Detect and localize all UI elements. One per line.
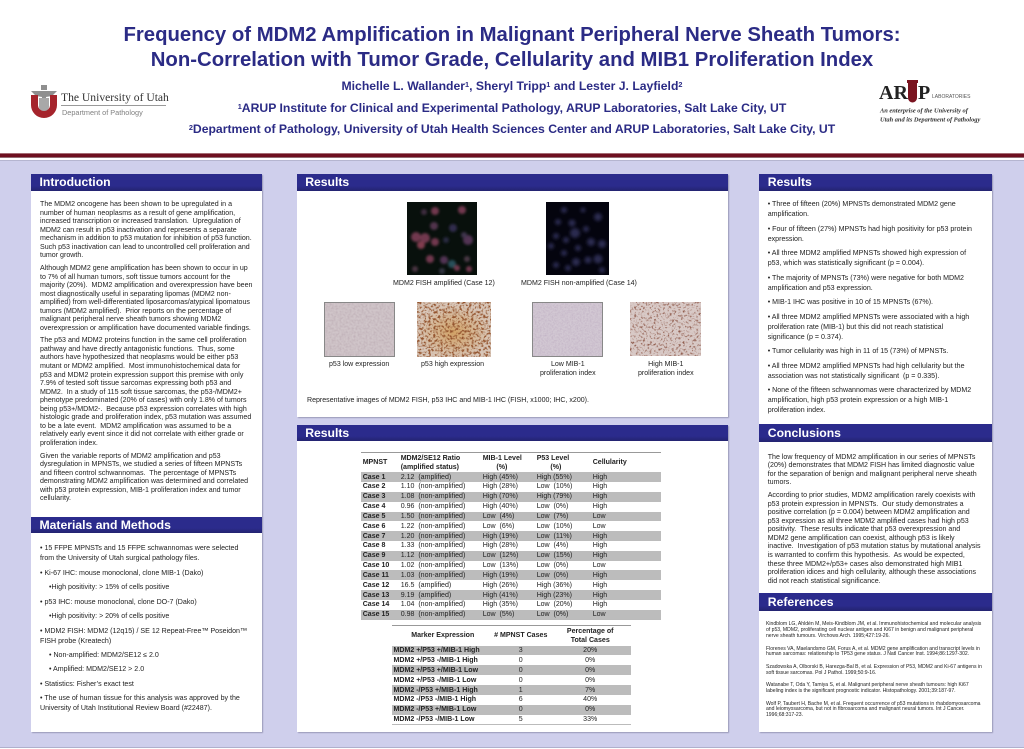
affiliation 2: 2Department of Pathology, University of Utah Health Sciences Center and ARUP Laboratories, Salt Lake City, UT bbox=[189, 122, 835, 136]
intro paragraph 2: amplified) from well-differentiated liposarcomas/atypical lipomatous bbox=[40, 298, 250, 306]
reference 5: 1996;68:317-23. bbox=[766, 712, 803, 718]
header divider band bbox=[0, 153, 1024, 158]
figure legend: Representative images of MDM2 FISH, p53 IHC and MIB-1 IHC (FISH, x1000; IHC, x200). bbox=[307, 397, 589, 404]
intro paragraph 3: histologic grade and proliferation index, p53 mutation was assumed bbox=[40, 413, 251, 421]
methods list: •High positivity: > 15% of cells positive bbox=[49, 583, 169, 591]
methods list: • p53 IHC: mouse monoclonal, clone DO-7 (Dako) bbox=[40, 598, 197, 606]
table: case data: Low (15%) bbox=[537, 552, 572, 559]
reference 2 bbox=[766, 646, 980, 657]
table: marker expression: MDM2 -/P53 +/MIB-1 Low bbox=[393, 706, 476, 713]
logo: University of Utah: Department of Pathology bbox=[62, 108, 143, 117]
table: case data: High bbox=[593, 601, 607, 608]
intro paragraph 2: malignant peripheral nerve sheath tumors showing MDM2 bbox=[40, 315, 221, 323]
heading: conclusions bbox=[759, 424, 992, 442]
reference 1: nerve sheath tumours. Virchows Arch. 1995;427:19-26. bbox=[766, 633, 890, 639]
table: marker expression: 0 bbox=[519, 667, 523, 674]
results bullet list: expression. bbox=[768, 235, 804, 243]
logo: University of Utah bbox=[31, 85, 169, 118]
image: p53 high expression bbox=[417, 302, 491, 357]
table: case data: 1.50 (non-amplified) bbox=[401, 513, 465, 520]
table: case data: Low (20%) bbox=[537, 601, 572, 608]
table: case data: Case 1 bbox=[363, 474, 385, 481]
conclusions paragraph 2: these three MDM2+/p53+ cases also demonstrated high MIB1 bbox=[768, 560, 962, 568]
table: case data: Low bbox=[593, 523, 606, 530]
image: low MIB-1 bbox=[532, 302, 603, 357]
table: case data: High (41%) bbox=[483, 592, 518, 599]
results bullet list: p53, which was statistically significant (p = 0.004). bbox=[768, 259, 924, 267]
results bullet list: • Three of fifteen (20%) MPNSTs demonstrated MDM2 gene bbox=[768, 200, 956, 208]
table: case data: High bbox=[593, 542, 607, 549]
reference 2: Florenes VA, Maelandsmo GM, Forus A, et al. MDM2 gene amplification and transcript levels in bbox=[766, 646, 980, 652]
results bullet list: • Four of fifteen (27%) MPNSTs had high positivity for p53 protein bbox=[768, 225, 972, 233]
heading: introduction bbox=[31, 174, 262, 190]
table: case data: Low (5%) bbox=[483, 611, 514, 618]
table: case data: Case 8 bbox=[363, 542, 385, 549]
heading: results bbox=[297, 424, 728, 441]
reference 1 bbox=[766, 621, 982, 639]
table: case data: High (19%) bbox=[483, 572, 518, 579]
table: marker expression: 3 bbox=[519, 647, 523, 654]
table: case data: Low bbox=[593, 513, 606, 520]
table: case data: High (36%) bbox=[537, 582, 572, 589]
table: case data: High (19%) bbox=[483, 533, 518, 540]
caption: p53 high: p53 high expression bbox=[421, 361, 484, 368]
table: marker expression: MDM2 +/P53 +/MIB-1 Low bbox=[393, 667, 478, 674]
table: marker expression: 20% bbox=[583, 647, 597, 654]
table: case data: High bbox=[593, 503, 607, 510]
table: case data: 1.04 (non-amplified) bbox=[401, 601, 465, 608]
intro paragraph 1: The MDM2 oncogene has been shown to be upregulated in a bbox=[40, 200, 232, 208]
table: case data: (amplified status) bbox=[401, 464, 459, 471]
intro paragraph 3: authors have hypothesized that neoplasms would be either p53 bbox=[40, 353, 238, 361]
table: marker expression: 33% bbox=[583, 716, 597, 723]
results bullet list: • None of the fifteen schwannomas were characterized by MDM2 bbox=[768, 386, 971, 394]
table: marker expression: Marker Expression bbox=[411, 632, 474, 639]
logo: ARUP Laboratories: An enterprise of the University of bbox=[879, 108, 969, 114]
table: case data: Low (11%) bbox=[537, 533, 572, 540]
table: case data: (%) bbox=[496, 464, 507, 471]
table: case data: High (55%) bbox=[537, 474, 572, 481]
reference 4: labeling index is the significant prognostic indicator. Histopathology. 2001;39:187-97. bbox=[766, 688, 956, 694]
table: case data: Case 7 bbox=[363, 533, 385, 540]
reference 4 bbox=[766, 682, 969, 694]
heading: conclusions: Conclusions bbox=[768, 426, 841, 440]
conclusions paragraph 1: tumors. bbox=[768, 478, 791, 486]
table: case data: 2.12 (amplified) bbox=[401, 474, 451, 481]
table: marker expression: 0% bbox=[585, 657, 595, 664]
intro paragraph 1: MDM2 can result in p53 inactivation and represents a separate bbox=[40, 226, 237, 234]
conclusions paragraph 2: According to prior studies, MDM2 amplification rarely coexists with bbox=[768, 491, 975, 499]
intro paragraph 4: and fifteen control schwannomas. The percentage of MPNSTs bbox=[40, 469, 236, 477]
results bullet list: • MIB-1 IHC was positive in 10 of 15 MPNSTs (67%). bbox=[768, 298, 933, 306]
methods list: • Statistics: Fisher’s exact test bbox=[40, 680, 134, 688]
table: marker expression: Total Cases bbox=[571, 637, 610, 644]
center column: results tables panel bbox=[297, 424, 728, 732]
table: case data: Case 11 bbox=[363, 572, 389, 579]
methods list: • Non-amplified: MDM2/SE12 ≤ 2.0 bbox=[49, 651, 159, 659]
caption: FISH amplified: MDM2 FISH amplified (Case 12) bbox=[393, 280, 495, 287]
results bullet list: amplification, high p53 protein expression or a high MIB-1 bbox=[768, 396, 948, 404]
intro paragraph 3 bbox=[40, 336, 251, 447]
table: marker expression: MDM2 -/P53 -/MIB-1 High bbox=[393, 696, 476, 703]
title line 1: Frequency of MDM2 Amplification in Malignant Peripheral Nerve Sheath Tumors: bbox=[123, 24, 901, 46]
table: case data: Case 9 bbox=[363, 552, 385, 559]
table: case data: High bbox=[593, 552, 607, 559]
conclusions paragraph 2: did not reach statistical significance. bbox=[768, 577, 881, 585]
section: results bullets bbox=[759, 174, 992, 414]
logo: ARUP Laboratories: AR bbox=[879, 82, 908, 104]
heading: introduction: Introduction bbox=[40, 175, 111, 189]
table: case data: Low bbox=[593, 562, 606, 569]
table: marker expression: 0 bbox=[519, 677, 523, 684]
heading: results: Results bbox=[305, 175, 349, 189]
intro paragraph 1: mechanism in addition to p53 mutation for inhibition of p53 function. bbox=[40, 234, 252, 242]
reference 5 bbox=[766, 700, 981, 718]
table: case data: High (35%) bbox=[483, 601, 518, 608]
table: marker expression: 0 bbox=[519, 706, 523, 713]
table: case data: Low (0%) bbox=[537, 503, 568, 510]
table: marker expression: 1 bbox=[519, 686, 523, 694]
table: case data: Low (4%) bbox=[483, 513, 514, 520]
table: case data: High bbox=[593, 582, 607, 589]
intro paragraph 3: 7.9% of tested soft tissue sarcomas expressing both p53 and bbox=[40, 379, 231, 387]
table: case data: High (70%) bbox=[483, 493, 518, 500]
table: case data: MPNST bbox=[363, 459, 387, 466]
table: marker expression: MDM2 +/P53 -/MIB-1 High bbox=[393, 657, 478, 664]
table: case data: Case 10 bbox=[363, 562, 389, 569]
conclusions paragraph 2: positive correlation (p = 0.004) between MDM2 amplification and bbox=[768, 508, 970, 516]
methods list: • 15 FFPE MPNSTs and 15 FFPE schwannomas were selected bbox=[40, 544, 238, 552]
caption: high MIB-1: proliferation index bbox=[638, 370, 694, 377]
methods list: • The use of human tissue for this analysis was approved by the bbox=[40, 694, 240, 702]
table: case data: High (28%) bbox=[483, 542, 518, 549]
table: case data: Case 6 bbox=[363, 523, 385, 530]
table: marker expression: 7% bbox=[585, 686, 595, 694]
intro paragraph 3: proliferation index. bbox=[40, 439, 98, 447]
table: case data: Low (10%) bbox=[537, 483, 572, 490]
table: case data: High bbox=[593, 533, 607, 540]
table: case data: Case 3 bbox=[363, 493, 385, 500]
reference 4: Watanabe T, Oda Y, Tamiya S, et al. Malignant peripheral nerve sheath tumours: high Ki67 bbox=[766, 682, 969, 688]
heading: results bbox=[297, 174, 728, 191]
table: case data: High bbox=[593, 474, 607, 481]
table: marker expression: Percentage of bbox=[567, 628, 614, 635]
conclusions paragraph 2: MDM2 gene amplification can coexist, although p53 is likely bbox=[768, 534, 955, 542]
reference 3 bbox=[766, 664, 982, 676]
heading: materials and methods bbox=[31, 517, 262, 533]
intro paragraph 4: demonstrating MDM2 amplification was determined and correlated bbox=[40, 477, 248, 485]
intro paragraph 1: Such p53 inactivation can lead to uncontrolled cell proliferation and bbox=[40, 243, 250, 251]
table: marker expression: 0% bbox=[585, 706, 595, 713]
conclusions paragraph 2 bbox=[768, 491, 981, 585]
intro paragraph 4 bbox=[40, 452, 248, 502]
table: case data: MIB-1 Level bbox=[483, 455, 522, 462]
table: marker expression: 0% bbox=[585, 677, 595, 684]
intro paragraph 2: most diagnostically useful in separating lipomas (MDM2 non- bbox=[40, 290, 231, 298]
results bullet list: association was not statistically significant (p = 0.335). bbox=[768, 372, 939, 380]
table: case data: Cellularity bbox=[593, 459, 627, 466]
table: case data: High (79%) bbox=[537, 493, 572, 500]
table: case data: 1.10 (non-amplified) bbox=[401, 483, 465, 490]
table: marker expression: MDM2 -/P53 +/MIB-1 High bbox=[393, 686, 478, 694]
intro paragraph 2: majority (20%). MDM2 amplification and overexpression have been bbox=[40, 281, 252, 289]
table: marker expression bbox=[392, 625, 631, 725]
results bullet list: • All three MDM2 amplified MPNSTs had high cellularity but the bbox=[768, 362, 965, 370]
conclusions paragraph 1: (20%) demonstrates that MDM2 FISH has limited diagnostic value bbox=[768, 461, 975, 469]
table: case data: Case 15 bbox=[363, 611, 389, 618]
heading: results: Results bbox=[305, 426, 349, 440]
caption: high MIB-1 bbox=[638, 360, 694, 377]
image: MDM2 FISH amplified bbox=[407, 202, 477, 275]
methods list bbox=[40, 544, 247, 712]
intro paragraph 3: relatively early event since it did not correlate with either grade or bbox=[40, 430, 244, 438]
table: case data: Low (7%) bbox=[537, 513, 568, 520]
intro paragraph 3: p53 and MDM2 protein expression support this premise with only bbox=[40, 371, 243, 379]
logo: ARUP Laboratories: Utah and its Department of Pathology bbox=[880, 116, 980, 124]
table: marker expression: MDM2 -/P53 -/MIB-1 Low bbox=[393, 716, 475, 723]
table: case data: Case 4 bbox=[363, 503, 385, 510]
caption: FISH non-amplified: MDM2 FISH non-amplified (Case 14) bbox=[521, 280, 637, 287]
table: case data: High (23%) bbox=[537, 592, 572, 599]
table: case data: Low (4%) bbox=[537, 542, 568, 549]
table: case data: High (40%) bbox=[483, 503, 518, 510]
intro paragraph 2: to 7% of all human tumors, soft tissue tumors account for the bbox=[40, 273, 230, 281]
table: case data: Case 2 bbox=[363, 483, 385, 490]
intro paragraph 3: to be a late event. MDM2 amplification was assumed to be a bbox=[40, 422, 231, 430]
section: introduction bbox=[31, 174, 262, 502]
title line 2: Non-Correlation with Tumor Grade, Cellularity and MIB1 Proliferation Index bbox=[151, 49, 873, 71]
table: marker expression: MDM2 +/P53 +/MIB-1 High bbox=[393, 647, 480, 654]
results bullet list: amplification. bbox=[768, 210, 809, 218]
table: case data: 1.08 (non-amplified) bbox=[401, 493, 465, 500]
table: marker expression: 0 bbox=[519, 657, 523, 664]
table: marker expression: 6 bbox=[519, 696, 523, 703]
reference 1: Kindblom LG, Ahldén M, Meis-Kindblom JM, et al. Immunohistochemical and molecular analysis bbox=[766, 621, 981, 627]
table: case data: High (45%) bbox=[483, 474, 518, 481]
intro paragraph 3: mutant or MDM2 amplified. Most immunohistochemical data for bbox=[40, 362, 240, 370]
intro paragraph 3: being p53+/MDM2-. Because p53 expression correlates with high bbox=[40, 405, 247, 413]
heading: references: References bbox=[768, 595, 834, 609]
table: marker expression: MDM2 +/P53 -/MIB-1 Low bbox=[393, 677, 476, 684]
heading: results: Results bbox=[768, 175, 812, 189]
conclusions paragraph 2: p53 protein expression in MPNSTs. Our study demonstrates a bbox=[768, 500, 964, 508]
methods list: •High positivity: > 20% of cells positive bbox=[49, 612, 169, 620]
caption: low MIB-1: Low MIB-1 bbox=[551, 361, 585, 368]
results bullet list: • All three MDM2 amplified MPNSTs were associated with a high bbox=[768, 313, 969, 321]
table: case data bbox=[361, 452, 661, 620]
intro paragraph 4: cellularity. bbox=[40, 494, 71, 502]
reference 5: Wolf P, Taubert H, Bache M, et al. Frequent occurrence of p53 mutations in rhabdomyosarcoma bbox=[766, 700, 981, 706]
table: case data: High bbox=[593, 592, 607, 599]
conclusions paragraph 1: for the separation of benign and malignant peripheral nerve sheath bbox=[768, 470, 977, 478]
caption: low MIB-1: proliferation index bbox=[540, 370, 596, 377]
intro paragraph 4: dysregulation in MPNSTs, we studied a series of fifteen MPNSTs bbox=[40, 460, 242, 468]
table: case data: P53 Level bbox=[537, 455, 569, 462]
intro paragraph 1: number of human neoplasms as a result of gene amplification, bbox=[40, 209, 235, 217]
intro paragraph 3: pathway and have directly antagonistic functions. Thus, some bbox=[40, 345, 235, 353]
table: case data: High (26%) bbox=[483, 582, 518, 589]
methods list: FISH probe (Kreatech) bbox=[40, 637, 111, 645]
header: title and authors bbox=[123, 24, 901, 136]
reference 2: human sarcomas: relationship to TP53 gene status. J Natl Cancer Inst. 1994;86:1297-302. bbox=[766, 651, 969, 657]
intro paragraph 4: Given the variable reports of MDM2 amplification and p53 bbox=[40, 452, 221, 460]
image: MDM2 FISH non-amplified bbox=[546, 202, 609, 275]
conclusions paragraph 1: The low frequency of MDM2 amplification in our series of MPNSTs bbox=[768, 453, 975, 461]
table: case data: Case 5 bbox=[363, 513, 385, 520]
conclusions paragraph 2: is warranted to confirm this hypothesis. As would be expected, bbox=[768, 551, 965, 559]
conclusions paragraph 2: inactive. Investigation of p53 mutation status by mutational analysis bbox=[768, 542, 981, 550]
table: case data: 0.96 (non-amplified) bbox=[401, 503, 465, 510]
intro paragraph 2 bbox=[40, 264, 252, 332]
methods list: from the University of Utah surgical pathology files. bbox=[40, 554, 199, 562]
logo: ARUP Laboratories: P bbox=[918, 82, 930, 104]
right column panel bbox=[759, 174, 992, 732]
logo: ARUP Laboratories: LABORATORIES bbox=[932, 94, 971, 100]
intro paragraph 1 bbox=[40, 200, 252, 259]
table: case data: High bbox=[593, 483, 607, 490]
table: case data: 1.22 (non-amplified) bbox=[401, 523, 465, 530]
image: p53 low expression bbox=[324, 302, 395, 357]
center column: results images panel bbox=[297, 174, 728, 417]
methods list: • Ki-67 IHC: mouse monoclonal, clone MIB-1 (Dako) bbox=[40, 569, 203, 577]
conclusions paragraph 2: p53 expression as all three MDM2 amplified cases had high p53 bbox=[768, 517, 969, 525]
reference 1: of p53, MDM2, proliferating cell nuclear antigen and Ki67 in benign and malignant peripheral bbox=[766, 627, 973, 633]
table: marker expression: # MPNST Cases bbox=[494, 632, 547, 639]
table: marker expression: 0% bbox=[585, 667, 595, 674]
table: case data: 1.33 (non-amplified) bbox=[401, 542, 465, 549]
table: case data: Case 14 bbox=[363, 601, 389, 608]
caption: low MIB-1 bbox=[540, 361, 596, 377]
results bullet list: proliferation index. bbox=[768, 406, 826, 414]
section: conclusions bbox=[759, 424, 992, 585]
authors: Michelle L. Wallander1, Sheryl Tripp1 and Lester J. Layfield2 bbox=[342, 79, 682, 93]
image: high MIB-1 bbox=[630, 302, 701, 356]
table: case data: Low bbox=[593, 611, 606, 618]
intro paragraph 4: with p53 protein expression, MIB-1 proliferation index and tumor bbox=[40, 486, 241, 494]
section: materials and methods bbox=[31, 517, 262, 712]
table: case data: Case 13 bbox=[363, 592, 389, 599]
results bullet list: significance (p = 0.374). bbox=[768, 333, 843, 341]
table: case data: High bbox=[593, 493, 607, 500]
caption: p53 low: p53 low expression bbox=[329, 361, 389, 368]
table: case data: Low (10%) bbox=[537, 523, 572, 530]
section: references bbox=[759, 593, 992, 718]
logo: University of Utah: The University of Utah bbox=[61, 91, 169, 104]
table: case data: Low (12%) bbox=[483, 552, 518, 559]
table: case data: 1.02 (non-amplified) bbox=[401, 562, 465, 569]
table: case data: (%) bbox=[550, 464, 561, 471]
table: case data: 1.12 (non-amplified) bbox=[401, 552, 465, 559]
reference 5: and leiomyosarcoma, but not in fibrosarcoma and malignant neural tumors. Int J Cancer. bbox=[766, 706, 964, 712]
table: marker expression: 5 bbox=[519, 716, 523, 723]
results bullet list bbox=[768, 200, 972, 414]
conclusions paragraph 1 bbox=[768, 453, 977, 486]
conclusions paragraph 2: proliferation idices and high cellularity, although these associations bbox=[768, 568, 976, 576]
intro paragraph 2: overexpression or amplification have documented variable findings. bbox=[40, 324, 251, 332]
table: case data: 1.03 (non-amplified) bbox=[401, 572, 465, 579]
table: case data: 1.20 (non-amplified) bbox=[401, 533, 465, 540]
table: case data: 9.19 (amplified) bbox=[401, 592, 451, 599]
reference 3: Szadowska A, Olborski B, Harezga-Bal B, et al. Expression of P53, MDM2 and Ki-67 antigens in bbox=[766, 664, 982, 670]
intro paragraph 2: tumors (MDM2 amplified). Prior reports on the percentage of bbox=[40, 307, 231, 315]
table: case data: 0.98 (non-amplified) bbox=[401, 611, 465, 618]
table: case data: 16.5 (amplified) bbox=[401, 582, 451, 589]
results bullet list: amplification and p53 expression. bbox=[768, 284, 873, 292]
table: case data: High (28%) bbox=[483, 483, 518, 490]
table: case data: High bbox=[593, 572, 607, 579]
intro paragraph 3: MDM2. In a study of 115 soft tissue sarcomas, the p53-/MDM2+ bbox=[40, 388, 242, 396]
methods list: • Amplified: MDM2/SE12 > 2.0 bbox=[49, 665, 144, 673]
results bullet list: • The majority of MPNSTs (73%) were negative for both MDM2 bbox=[768, 274, 964, 282]
table: case data: Low (13%) bbox=[483, 562, 518, 569]
intro paragraph 3: The p53 and MDM2 proteins function in the same cell proliferation bbox=[40, 336, 247, 344]
conclusions paragraph 2: positivity. These results indicate that p53 overexpression and bbox=[768, 525, 960, 533]
table: case data: Low (0%) bbox=[537, 562, 568, 569]
table: marker expression: 40% bbox=[583, 696, 597, 703]
results bullet list: proliferation rate (MIB-1) but this did not reach statistical bbox=[768, 323, 943, 331]
intro paragraph 3: phenotype predominated (20% of cases) with only 1.8% of tumors bbox=[40, 396, 247, 404]
affiliation 1: 1ARUP Institute for Clinical and Experimental Pathology, ARUP Laboratories, Salt Lake City, UT bbox=[238, 101, 786, 115]
methods list: • MDM2 FISH: MDM2 (12q15) / SE 12 Repeat-Free™ Poseidon™ bbox=[40, 627, 247, 635]
heading: materials and methods: Materials and Methods bbox=[40, 518, 171, 532]
lavender poster background bbox=[0, 160, 1024, 748]
reference 3: soft tissue sarcomas. Pol J Pathol. 1999;50:9-16. bbox=[766, 670, 876, 676]
results bullet list: • All three MDM2 amplified MPNSTs showed high expression of bbox=[768, 249, 966, 257]
table: case data: Low (0%) bbox=[537, 572, 568, 579]
heading: results bbox=[759, 174, 992, 191]
results bullet list: • Tumor cellularity was high in 11 of 15 (73%) of MPNSTs. bbox=[768, 347, 948, 355]
heading: references bbox=[759, 593, 992, 611]
intro paragraph 2: Although MDM2 gene amplification has been shown to occur in up bbox=[40, 264, 248, 272]
table: case data: MDM2/SE12 Ratio bbox=[401, 455, 460, 462]
table: case data: Case 12 bbox=[363, 582, 389, 589]
intro paragraph 1: tumor growth. bbox=[40, 251, 83, 259]
logo: ARUP Laboratories bbox=[879, 80, 980, 124]
intro paragraph 1: increased transcription or increased translation. Upregulation of bbox=[40, 217, 241, 225]
caption: high MIB-1: High MIB-1 bbox=[648, 361, 683, 368]
table: case data: Low (6%) bbox=[483, 523, 514, 530]
left column panel bbox=[31, 174, 262, 732]
methods list: University of Utah Institutional Review Board (#22487). bbox=[40, 704, 212, 712]
table: case data: Low (0%) bbox=[537, 611, 568, 618]
